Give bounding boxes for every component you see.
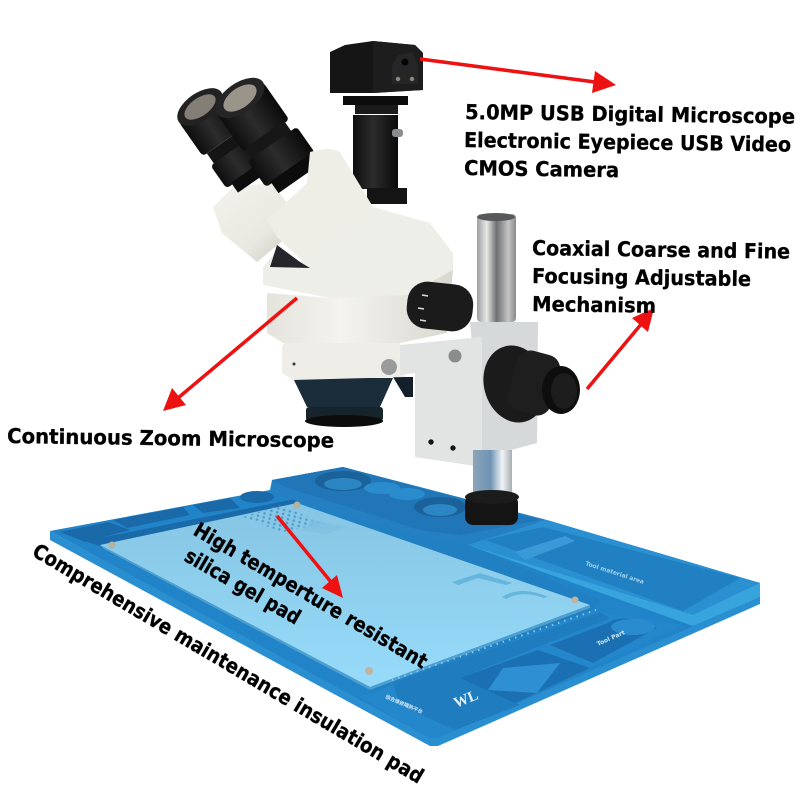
label: focusing mechanism: Mechanism	[532, 292, 656, 318]
ruler and logo area: WL	[452, 688, 481, 712]
tool material tray: Tool material area	[584, 560, 645, 586]
ruler and logo area: 综合维修隔热平台	[384, 693, 424, 715]
ruler and logo area: Tool Part	[596, 629, 626, 648]
pole lower	[473, 450, 512, 500]
arm bracket	[381, 322, 538, 467]
label: focusing mechanism: Focusing Adjustable	[532, 264, 751, 291]
pole collar	[465, 490, 519, 525]
front white tube	[267, 149, 373, 268]
objective lens	[293, 377, 413, 427]
camera	[330, 41, 423, 114]
microscope head	[263, 207, 453, 298]
label: camera: CMOS Camera	[464, 156, 619, 182]
arrow: zoom microscope	[163, 298, 297, 411]
zoom body band	[267, 270, 453, 343]
arrow: silica pad	[277, 516, 343, 598]
camera adapter tube	[353, 115, 407, 204]
coarse knob	[405, 280, 475, 333]
label: silica gel pad: High temperture resistant	[189, 518, 432, 674]
lens ring	[282, 343, 405, 380]
pole upper	[477, 213, 516, 322]
silica gel pad	[100, 502, 600, 692]
label: camera	[464, 100, 795, 182]
label: zoom microscope: Continuous Zoom Microscope	[7, 424, 334, 453]
ruler and logo area	[360, 610, 683, 738]
microscope	[171, 41, 580, 525]
insulation pad	[50, 467, 760, 746]
eyepiece: front	[207, 69, 322, 197]
arrow: focusing mechanism	[587, 308, 654, 389]
tool tray with round holes	[272, 467, 547, 545]
back white tube	[213, 183, 300, 262]
pad top plate	[50, 467, 760, 738]
focus knob	[475, 338, 580, 430]
label: focusing mechanism	[532, 236, 790, 318]
upper-left slots	[60, 491, 300, 546]
eyepiece: back	[171, 81, 274, 197]
arrow: camera	[420, 59, 616, 93]
pad side edge	[50, 531, 760, 746]
label: silica gel pad: silica gel pad	[180, 544, 305, 629]
tool material tray	[468, 520, 760, 626]
